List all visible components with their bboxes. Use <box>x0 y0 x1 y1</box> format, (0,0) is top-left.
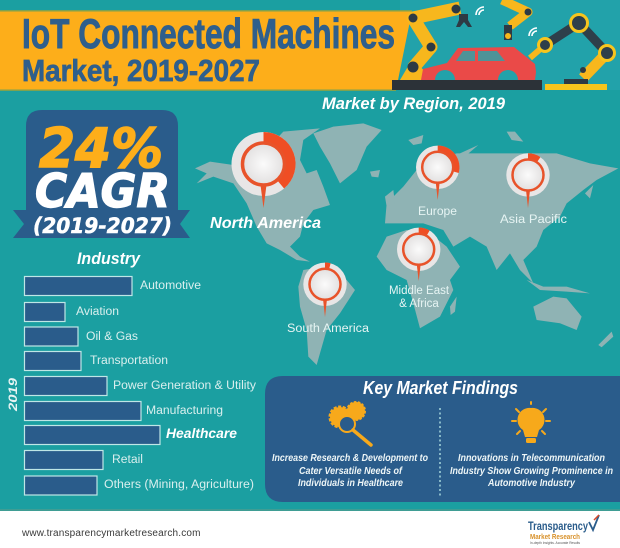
bar chart: industry: Retail <box>112 454 143 466</box>
title: Market, 2019-2027 <box>22 53 260 88</box>
logo: Transparency Market Research: Market Research <box>530 532 580 541</box>
bar chart: industry: Automotive <box>140 280 201 292</box>
icon: light bulb <box>512 402 550 443</box>
illustration: robot arms and car <box>392 0 614 90</box>
bar chart: industry: Manufacturing <box>146 405 223 417</box>
label: Europe: Europe <box>418 206 457 218</box>
finding: telecommunication: Innovations in Telecommunication <box>458 453 605 464</box>
bar chart: industry: Aviation <box>76 306 119 318</box>
logo: Transparency Market Research <box>528 515 599 545</box>
heading: key market findings: Key Market Findings <box>363 378 518 398</box>
pin: North America <box>232 132 296 208</box>
header banner <box>0 0 620 91</box>
finding: research and development: Individuals in Healthcare <box>298 478 403 489</box>
icon: gear and magnifier <box>330 402 371 445</box>
label: Middle East and Africa: & Africa <box>399 298 439 310</box>
finding: research and development <box>272 453 428 489</box>
bar chart: industry <box>24 276 256 495</box>
label: Middle East and Africa: Middle East <box>389 285 450 297</box>
bar chart: industry: Healthcare <box>166 426 237 441</box>
finding: research and development: Increase Research & Development to <box>272 453 428 464</box>
bar chart: industry: Power Generation & Utility <box>113 380 256 392</box>
pin: Europe <box>416 146 459 200</box>
finding: telecommunication <box>450 453 613 489</box>
divider <box>439 408 441 497</box>
finding: telecommunication: Automotive Industry <box>487 478 575 489</box>
title <box>22 10 395 88</box>
pin: Asia Pacific <box>506 153 550 208</box>
icon: wifi signals <box>476 7 537 36</box>
title: IoT Connected Machines <box>22 10 395 57</box>
pin: Middle East and Africa <box>397 228 440 281</box>
footer url: www.transparencymarketresearch.com <box>21 528 201 539</box>
label: North America: North America <box>210 215 321 232</box>
bar chart: industry: Others (Mining, Agriculture) <box>104 479 254 491</box>
CAGR badge: 24% <box>39 117 163 180</box>
bar chart: industry: Oil & Gas <box>86 331 138 343</box>
CAGR badge: (2019-2027) <box>33 214 172 238</box>
finding: research and development: Cater Versatile Needs of <box>299 466 403 477</box>
label: South America: South America <box>287 323 370 335</box>
CAGR badge: CAGR <box>35 164 170 218</box>
pin: South America <box>303 263 347 317</box>
world map <box>195 123 618 365</box>
logo: Transparency Market Research: Transparency <box>528 521 588 533</box>
logo: Transparency Market Research: In-depth Insights. Accurate Results <box>530 541 580 545</box>
CAGR badge <box>13 110 190 238</box>
panel: key market findings <box>265 376 620 502</box>
heading: market by region: Market by Region, 2019 <box>322 94 506 113</box>
axis label: 2019: 2019 <box>8 377 20 412</box>
label: Asia Pacific: Asia Pacific <box>500 214 567 226</box>
bar chart: industry: Transportation <box>90 355 168 367</box>
heading: industry: Industry <box>77 250 141 268</box>
